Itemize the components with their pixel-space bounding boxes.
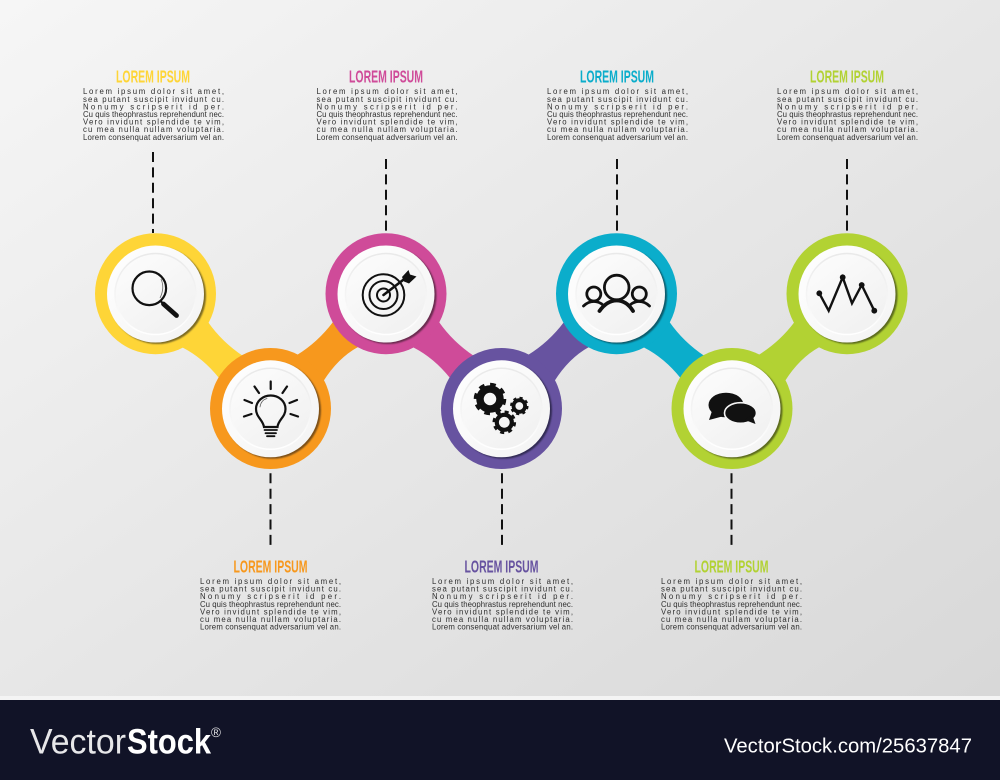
body text 6 <box>661 577 802 632</box>
body text 4: cu mea nulla nullam voluptaria. <box>432 615 573 624</box>
body text 3: Lorem ipsum dolor sit amet, <box>316 87 458 96</box>
body text 3: Lorem consenquat adversarium vel an. <box>316 133 458 142</box>
icon: magnifying glass <box>132 272 176 316</box>
body text 5: Nonumy scripserit id per. <box>547 102 688 111</box>
icon: light bulb <box>244 382 298 436</box>
footer logo: ® <box>211 725 221 740</box>
text block 4 <box>432 556 573 632</box>
body text 2 <box>200 577 341 632</box>
node 6: chat <box>672 348 792 469</box>
body text 4: Lorem ipsum dolor sit amet, <box>432 577 573 586</box>
heading 5: LOREM IPSUM <box>580 66 654 86</box>
body text 5: Cu quis theophrastus reprehendunt nec. <box>547 110 688 119</box>
body text 2: Lorem ipsum dolor sit amet, <box>200 577 341 586</box>
body text 7: sea putant suscipit invidunt cu. <box>777 95 918 104</box>
body text 6: Lorem ipsum dolor sit amet, <box>661 577 802 586</box>
footer logo: Stock <box>127 722 211 762</box>
body text 1: sea putant suscipit invidunt cu. <box>83 95 224 104</box>
body text 6: Lorem consenquat adversarium vel an. <box>661 623 802 632</box>
heading 3: LOREM IPSUM <box>349 66 423 86</box>
body text 7: Cu quis theophrastus reprehendunt nec. <box>777 110 918 119</box>
body text 7: Vero invidunt splendide te vim, <box>777 118 918 127</box>
body text 4: Nonumy scripserit id per. <box>432 592 573 601</box>
heading 2: LOREM IPSUM <box>234 556 308 576</box>
body text 6: Nonumy scripserit id per. <box>661 592 802 601</box>
body text 1: Lorem ipsum dolor sit amet, <box>83 87 224 96</box>
body text 1: Vero invidunt splendide te vim, <box>83 118 224 127</box>
body text 7: Nonumy scripserit id per. <box>777 102 918 111</box>
text block 7 <box>777 66 918 142</box>
body text 1: Lorem consenquat adversarium vel an. <box>83 133 224 142</box>
body text 3: Vero invidunt splendide te vim, <box>316 118 458 127</box>
body text 5: sea putant suscipit invidunt cu. <box>547 95 688 104</box>
timeline connectors <box>182 322 820 381</box>
node 5: team <box>556 233 677 354</box>
node 7: chart <box>786 233 908 354</box>
text block 1 <box>83 66 224 142</box>
body text 6: Vero invidunt splendide te vim, <box>661 607 802 616</box>
body text 2: Lorem consenquat adversarium vel an. <box>200 623 341 632</box>
text block 3 <box>316 66 458 142</box>
footer logo: Vector <box>30 722 126 762</box>
body text 6: cu mea nulla nullam voluptaria. <box>661 615 802 624</box>
body text 1: cu mea nulla nullam voluptaria. <box>83 125 224 134</box>
body text 4: Vero invidunt splendide te vim, <box>432 607 573 616</box>
body text 4: sea putant suscipit invidunt cu. <box>432 585 573 594</box>
body text 2: Cu quis theophrastus reprehendunt nec. <box>200 600 341 609</box>
icon: target with arrow <box>363 270 416 316</box>
node 4: gears <box>441 348 562 469</box>
body text 5 <box>547 87 688 142</box>
heading 1: LOREM IPSUM <box>116 66 190 86</box>
body text 1: Nonumy scripserit id per. <box>83 102 224 111</box>
body text 4 <box>432 577 573 632</box>
icon: speech bubbles <box>708 393 756 424</box>
text block 5 <box>547 66 688 142</box>
body text 1 <box>83 87 224 142</box>
body text 7: Lorem ipsum dolor sit amet, <box>777 87 918 96</box>
body text 3: Cu quis theophrastus reprehendunt nec. <box>316 110 458 119</box>
icon: group of people <box>584 275 650 311</box>
body text 5: cu mea nulla nullam voluptaria. <box>547 125 688 134</box>
body text 7 <box>777 87 918 142</box>
body text 6: Cu quis theophrastus reprehendunt nec. <box>661 600 802 609</box>
body text 5: Lorem consenquat adversarium vel an. <box>547 133 688 142</box>
dashed leader lines <box>153 152 847 545</box>
body text 7: Lorem consenquat adversarium vel an. <box>777 133 918 142</box>
body text 3 <box>316 87 458 142</box>
body text 3: sea putant suscipit invidunt cu. <box>316 95 458 104</box>
body text 1: Cu quis theophrastus reprehendunt nec. <box>83 110 224 119</box>
body text 3: Nonumy scripserit id per. <box>316 102 458 111</box>
text block 6 <box>661 556 802 632</box>
heading 4: LOREM IPSUM <box>464 556 538 576</box>
body text 3: cu mea nulla nullam voluptaria. <box>316 125 458 134</box>
body text 6: sea putant suscipit invidunt cu. <box>661 585 802 594</box>
footer image id: VectorStock.com/25637847 <box>724 736 972 758</box>
footer band <box>0 700 1000 780</box>
text block 2 <box>200 556 341 632</box>
icon: line chart <box>816 274 877 314</box>
body text 4: Cu quis theophrastus reprehendunt nec. <box>432 600 573 609</box>
body text 2: sea putant suscipit invidunt cu. <box>200 585 341 594</box>
heading 6: LOREM IPSUM <box>694 556 768 576</box>
body text 7: cu mea nulla nullam voluptaria. <box>777 125 918 134</box>
body text 2: Nonumy scripserit id per. <box>200 592 341 601</box>
node 2: idea <box>210 348 331 469</box>
body text 5: Vero invidunt splendide te vim, <box>547 118 688 127</box>
icon: gears <box>476 385 527 433</box>
body text 4: Lorem consenquat adversarium vel an. <box>432 623 573 632</box>
body text 2: cu mea nulla nullam voluptaria. <box>200 615 341 624</box>
node 1: search <box>95 233 216 354</box>
node 3: target <box>326 233 446 354</box>
footer logo <box>30 722 221 762</box>
heading 7: LOREM IPSUM <box>810 66 884 86</box>
body text 2: Vero invidunt splendide te vim, <box>200 607 341 616</box>
body text 5: Lorem ipsum dolor sit amet, <box>547 87 688 96</box>
